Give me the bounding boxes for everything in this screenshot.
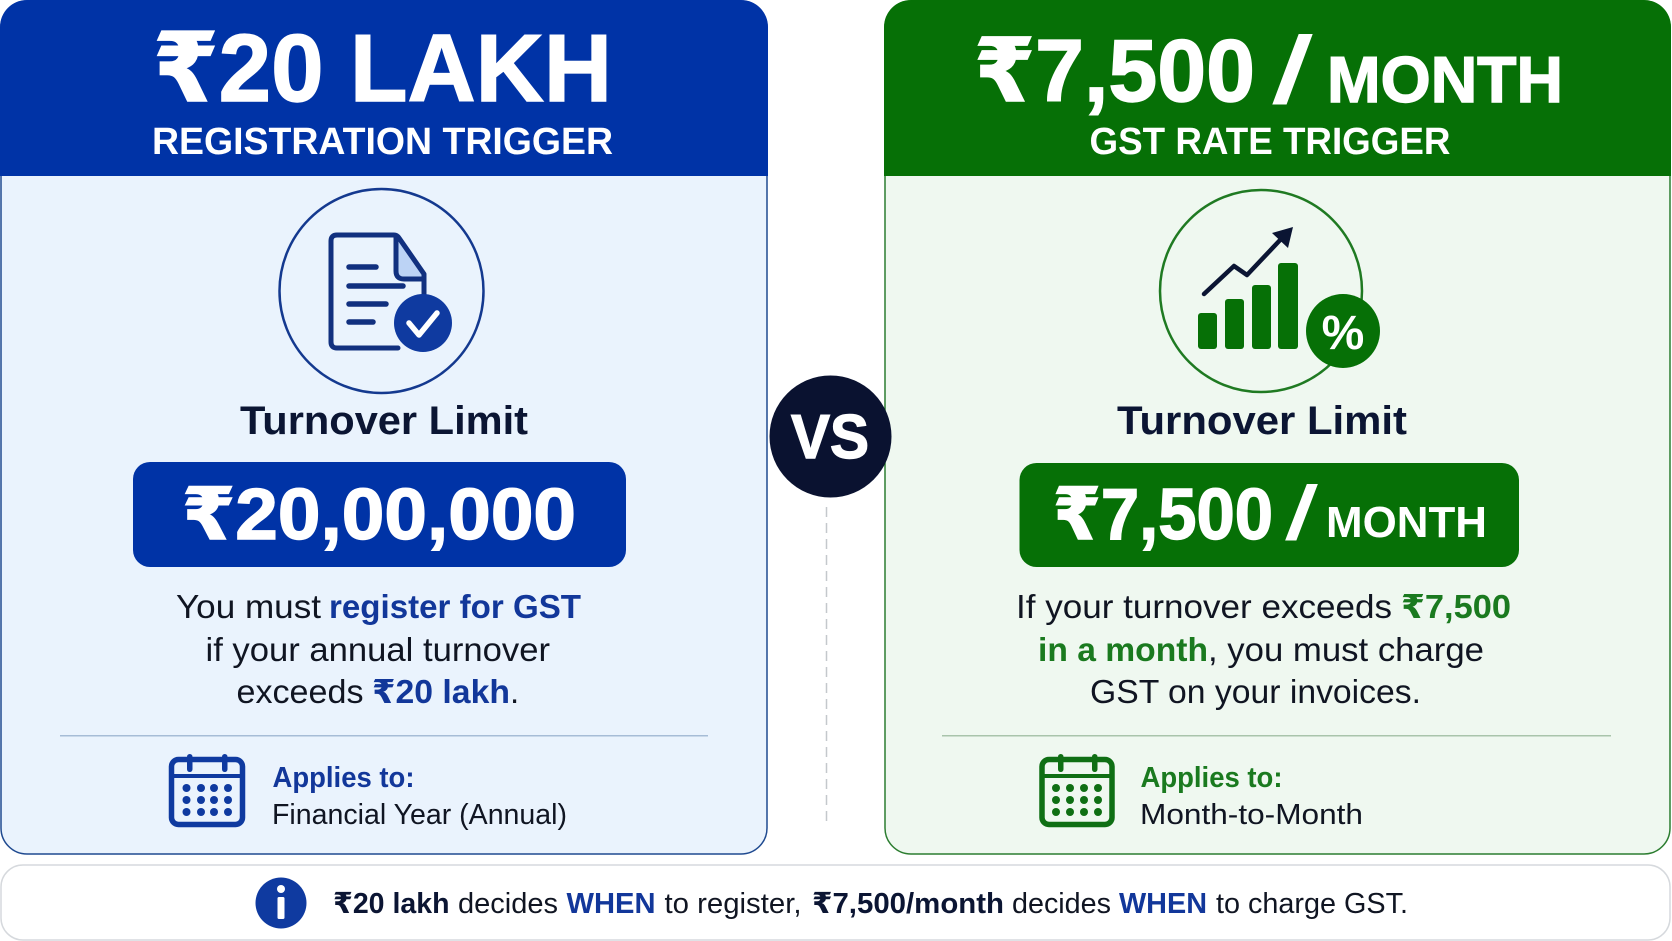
description text: You must	[176, 588, 321, 625]
icon: calendar	[171, 754, 243, 824]
footer message: WHEN	[1119, 888, 1207, 920]
applies to: financial year: Financial Year (Annual)	[272, 799, 567, 831]
description text: if your annual turnover	[206, 631, 550, 668]
subheading: GST rate trigger: GST RATE TRIGGER	[1090, 121, 1450, 163]
icon: growth chart with percent	[1160, 190, 1380, 392]
value pill: 7,500 per month: MONTH	[1326, 498, 1487, 547]
applies to: financial year: Applies to:	[272, 762, 414, 794]
description text: exceeds	[236, 673, 364, 710]
value pill: 20,00,000	[133, 462, 626, 567]
heading: 7,500 per month	[974, 20, 1563, 122]
VS badge	[770, 376, 892, 498]
value pill: 20,00,000: ₹20,00,000	[182, 475, 576, 555]
description text: .	[510, 673, 519, 710]
description text	[1016, 588, 1511, 710]
icon: document with check	[280, 189, 484, 393]
footer message	[333, 888, 1408, 920]
heading: 7,500 per month: MONTH	[1327, 43, 1563, 116]
footer message: to charge GST.	[1216, 888, 1408, 920]
footer message: to register,	[664, 888, 802, 920]
panel background	[885, 1, 1670, 854]
VS badge: VS	[791, 403, 869, 472]
panel background	[1, 1, 767, 854]
footer callout	[1, 865, 1670, 940]
footer message: decides	[458, 888, 558, 920]
label: turnover limit: Turnover Limit	[240, 399, 528, 443]
subheading: registration trigger: REGISTRATION TRIGGER	[152, 121, 613, 163]
icon: calendar	[1042, 754, 1112, 824]
panel: GST rate trigger	[884, 0, 1671, 854]
footer message: ₹7,500/month	[812, 888, 1004, 920]
panel: registration trigger	[0, 0, 768, 854]
applies to: month-to-month: Month-to-Month	[1140, 799, 1363, 831]
heading: 20 lakh: ₹20 LAKH	[153, 15, 612, 122]
applies to: month-to-month	[1140, 762, 1363, 831]
description text: , you must charge	[1208, 631, 1484, 668]
description text	[176, 588, 581, 710]
value pill: 7,500 per month: ₹7,500	[1053, 475, 1273, 555]
description text: ₹20 lakh	[372, 673, 510, 710]
heading: 7,500 per month: /	[1275, 20, 1311, 122]
value pill: 7,500 per month: /	[1287, 472, 1317, 555]
footer message: ₹20 lakh	[333, 888, 450, 920]
description text: register for GST	[329, 588, 581, 625]
description text: GST on your invoices.	[1090, 673, 1421, 710]
description text: in a month	[1038, 631, 1208, 668]
applies to: month-to-month: Applies to:	[1140, 762, 1282, 794]
heading: 7,500 per month: ₹7,500	[974, 21, 1255, 120]
icon: growth chart with percent: %	[1322, 307, 1364, 360]
label: turnover limit: Turnover Limit	[1117, 399, 1407, 443]
footer message: decides	[1012, 888, 1111, 920]
applies to: financial year	[272, 762, 567, 831]
header band	[884, 0, 1671, 176]
description text: ₹7,500	[1401, 588, 1511, 625]
value pill: 7,500 per month	[1020, 463, 1519, 567]
footer message: WHEN	[566, 888, 656, 920]
description text: If your turnover exceeds	[1016, 588, 1392, 625]
header band	[0, 0, 768, 176]
icon: info	[256, 878, 306, 928]
